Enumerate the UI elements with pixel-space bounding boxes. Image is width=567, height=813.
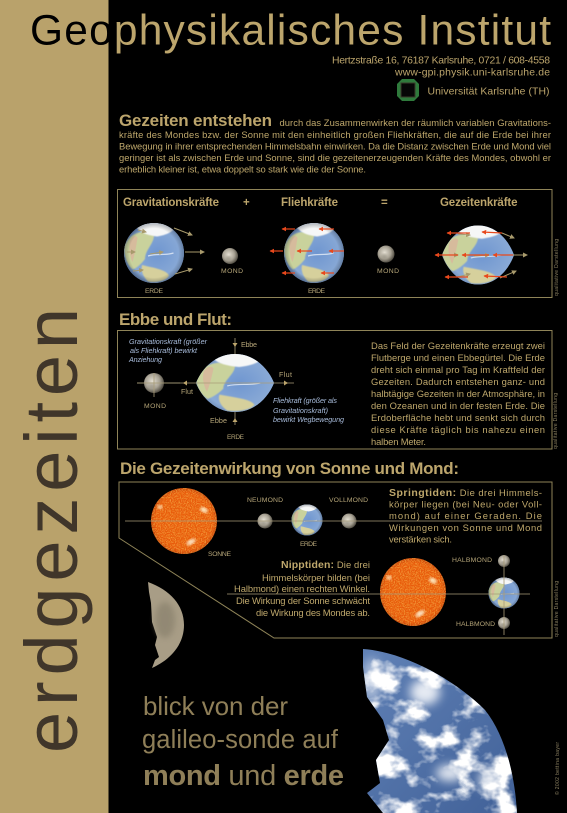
address block: Hertzstraße 16, 76187 Karlsruhe, 0721 / 608-4558 <box>332 56 550 66</box>
explanation text: den Ozeanen und in der festen Erde. Die <box>371 400 545 411</box>
explanation text: dreht sich einmal pro Tag im Kraftfeld der <box>371 364 545 375</box>
copyright: © 2002 bettina bayer <box>554 742 561 795</box>
spring tide labels <box>208 497 368 558</box>
force headings: = <box>381 197 388 209</box>
Nipptiden text: Halbmond) einen rechten Winkel. <box>234 583 370 594</box>
Springtiden text: Wirkungen von Sonne und Mond <box>389 522 542 533</box>
explanation text: halben Meter. <box>371 436 426 447</box>
intro text block: kräfte des Mondes bzw. der Sonne mit den einheitlich großen Fliehkräften, die auf die Erde bei ihrer <box>119 129 551 140</box>
force headings: Gezeitenkräfte <box>440 197 518 209</box>
gravity note: Gravitationskraft (größer <box>129 337 208 346</box>
explanation text: diese Kräfte täglich bis nahezu einen <box>371 424 545 435</box>
caption: mond und erde <box>143 760 344 792</box>
Springtiden text <box>389 487 542 544</box>
spring tide labels: ERDE <box>300 541 317 548</box>
diagram labels <box>144 340 292 441</box>
spring tide labels: VOLLMOND <box>329 497 368 504</box>
spring tide labels: NEUMOND <box>247 497 283 504</box>
intro text block: Gezeiten entstehen <box>119 111 272 130</box>
explanation text: Das Feld der Gezeitenkräfte erzeugt zwei <box>371 340 545 351</box>
caption <box>142 691 344 792</box>
neap tide labels: HALBMOND <box>452 557 492 564</box>
intro text block: erheblich kleiner ist, etwa doppelt so stark wie die der Sonne. <box>119 164 366 174</box>
moon, first column <box>222 248 238 264</box>
intro text block: Bewegung in ihrer entsprechenden Himmelsbahn einwirken. Da die Distanz zwischen Erde und Mond viel <box>119 140 551 152</box>
force headings: Gravitationskräfte <box>123 197 219 209</box>
gravity note: Anziehung <box>128 355 162 364</box>
Nipptiden text: Himmelskörper bilden (bei <box>262 572 370 583</box>
diagram labels: Ebbe <box>210 416 227 425</box>
explanation text <box>371 340 545 447</box>
spring tide diagram <box>125 488 542 554</box>
centrifugal note <box>273 396 344 424</box>
image: earth from space <box>363 649 517 813</box>
left tan band <box>0 0 108 813</box>
explanation text: Erdoberfläche hebt und senkt sich durch <box>371 412 545 423</box>
gravity note <box>128 337 208 364</box>
side note: qualitative Darstellung <box>554 239 560 296</box>
neap tide diagram <box>227 555 530 635</box>
diagram labels: Ebbe <box>241 340 257 349</box>
heading: Ebbe und Flut: Ebbe und Flut: <box>119 310 232 329</box>
earth with centrifugal arrows <box>270 220 347 286</box>
diagram labels: Flut <box>279 370 292 379</box>
heading: Gezeitenwirkung: Die Gezeitenwirkung von Sonne und Mond: <box>120 459 459 478</box>
centrifugal note: Gravitationskraft) <box>273 406 328 415</box>
Springtiden text: körper liegen (bei Neu- oder Voll- <box>389 498 542 510</box>
force headings: Fliehkräfte <box>281 197 338 209</box>
Nipptiden text: Nipptiden: Die drei <box>281 559 370 571</box>
caption: galileo-sonde auf <box>142 726 339 754</box>
Nipptiden text: Die Wirkung der Sonne schwächt <box>236 595 370 606</box>
address block: www-gpi.physik.uni-karlsruhe.de <box>394 68 550 78</box>
explanation text: Flutberge und einen Ebbegürtel. Die Erde <box>371 352 545 363</box>
Springtiden text: Springtiden: Die drei Himmels- <box>389 487 542 499</box>
diagram labels: MOND <box>144 403 166 410</box>
side note: qualitative Darstellung <box>553 393 559 449</box>
diagram labels: Flut <box>181 387 193 396</box>
body labels: MOND <box>377 268 399 275</box>
Springtiden text: verstärken sich. <box>389 534 452 544</box>
gravity note: als Fliehkraft) bewirkt <box>130 346 198 355</box>
moon, second column <box>378 246 394 262</box>
spring tide labels: SONNE <box>208 551 231 558</box>
body labels <box>145 268 399 295</box>
neap tide labels <box>452 557 495 628</box>
address block <box>332 56 550 78</box>
caption: blick von der <box>143 691 288 721</box>
earth with gravity arrows <box>121 220 204 286</box>
explanation text: halbtägige Gezeiten in der Atmosphäre, in <box>371 388 545 399</box>
Nipptiden text: die Wirkung des Mondes ab. <box>256 607 370 618</box>
tidal earth with combined arrows <box>435 223 527 287</box>
body labels: MOND <box>221 268 243 275</box>
explanation text: Gezeiten. Dadurch entstehen ganz- und <box>371 376 545 387</box>
force headings: + <box>243 197 250 209</box>
title: Geophysikalisches Institut <box>30 8 551 54</box>
vertical title: erdgezeiten <box>10 308 93 753</box>
university name: Universität Karlsruhe (TH) <box>428 86 550 98</box>
panel: ebb and flood <box>118 330 559 449</box>
diagram labels: ERDE <box>227 434 245 441</box>
panel: sun and moon <box>119 482 560 638</box>
side note: qualitative Darstellung <box>554 581 560 637</box>
centrifugal note: bewirkt Wegbewegung <box>273 415 344 424</box>
panel: forces <box>118 190 560 298</box>
neap tide labels: HALBMOND <box>456 621 495 628</box>
body labels: ERDE <box>308 288 325 295</box>
intro text block: geringer ist als zwischen Erde und Sonne, sind die gezeitenerzeugenden Kräfte des Mondes, obwohl er <box>119 152 551 163</box>
intro text block: durch das Zusammenwirken der räumlich variablen Gravitations- <box>280 117 551 128</box>
force headings <box>123 197 518 209</box>
intro text block <box>119 111 551 174</box>
image: crescent moon <box>148 582 184 668</box>
Nipptiden text <box>234 559 370 618</box>
body labels: ERDE <box>145 288 163 295</box>
centrifugal note: Fliehkraft (größer als <box>273 396 337 405</box>
Springtiden text: mond) auf einer Geraden. Die <box>389 510 542 521</box>
tidal diagram <box>137 338 294 425</box>
icon: university logo <box>397 79 419 101</box>
